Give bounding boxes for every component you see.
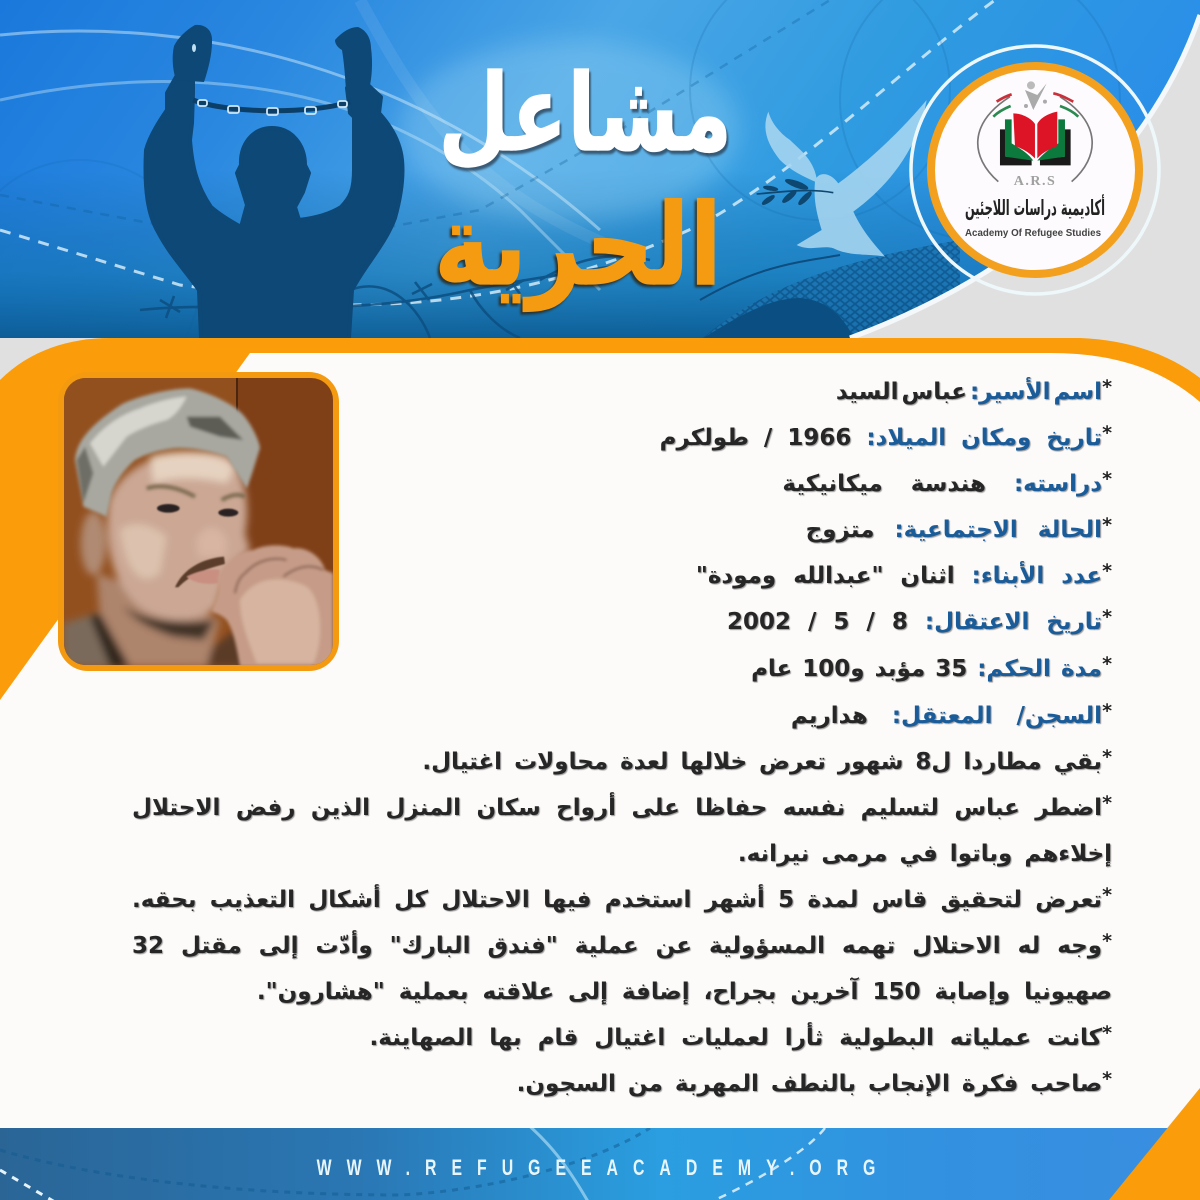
photo frame [58, 372, 339, 671]
detail: marital status: *الحالة الاجتماعية: متزوج [806, 514, 1112, 543]
detail: prison: *السجن/ المعتقل: هداريم [791, 700, 1112, 729]
detail: arrest date: *تاريخ الاعتقال: 8 / 5 / 2002 [727, 606, 1112, 635]
detail: name: *اسم الأسير: عباس السيد [836, 376, 1112, 405]
silhouette: prisoner with chained raised fists [146, 25, 403, 338]
eyes [157, 504, 180, 513]
panel: white content area [0, 353, 1200, 1128]
moustache [175, 557, 225, 587]
logo: A.R.S letters: A.R.S [1014, 174, 1056, 189]
ear [81, 512, 106, 575]
banner: blue sky background [0, 0, 1200, 338]
paragraph: interrogation: *تعرض لتحقيق قاس لمدة 5 أشهر استخدم فيها الاحتلال كل أشكال التعذيب بحقه. [132, 884, 1112, 913]
lips [187, 569, 220, 584]
detail: children: *عدد الأبناء: اثنان "عبدالله ومودة" [696, 560, 1112, 589]
footer url: WWW.REFUGEEACADEMY.ORG [317, 1157, 875, 1181]
footer bar [0, 1088, 1200, 1200]
title [434, 53, 732, 311]
left fist [173, 25, 212, 82]
paragraph: revenge operations: *كانت عملياته البطولية ثأرا لعمليات اغتيال قام بها الصهاينة. [370, 1022, 1112, 1051]
shirt [64, 611, 114, 665]
paragraph: charges: *وجه له الاحتلال تهمه المسؤولية عن عملية "فندق البارك" وأدّت إلى مقتل 32 [132, 930, 1112, 959]
icon: chain between wrists [193, 100, 350, 115]
brows [147, 486, 195, 497]
orange band behind content panel [0, 338, 1200, 720]
logo badge [911, 46, 1159, 294]
paragraph: forced surrender continued: إخلاءهم وباتوا في مرمى نيرانه. [738, 841, 1112, 867]
detail: birth date and place: *تاريخ ومكان الميلاد: 1966 / طولكرم [660, 422, 1112, 451]
white stripe along banner curve [850, 15, 1200, 338]
logo: English name: Academy Of Refugee Studies [965, 227, 1101, 239]
paragraph: forced surrender: *اضطر عباس لتسليم نفسه حفاظا على أرواح سكان المنزل الذين رفض الاحتلال [132, 792, 1112, 821]
icon: orange corner triangle [1109, 1088, 1200, 1200]
title line 2: orange: الحرية [434, 179, 722, 311]
paragraph: charges continued: صهيونيا وإصابة 150 آخرين بجراح، إضافة إلى علاقته بعملية "هشارون". [257, 979, 1112, 1005]
barbed wire [140, 256, 650, 338]
logo: book [1000, 112, 1071, 165]
title line 1: white: مشاعل [438, 53, 732, 176]
face [107, 452, 250, 620]
neck [97, 573, 220, 667]
logo: wheat arcs and figure [978, 81, 1092, 182]
paragraph: fugitive period: *بقي مطاردا ل8 شهور تعرض خلالها لعدة محاولات اغتيال. [422, 746, 1112, 775]
detail: studies: *دراسته: هندسة ميكانيكية [782, 468, 1112, 497]
paragraph: smuggled sperm idea: *صاحب فكرة الإنجاب بالنطف المهربة من السجون. [517, 1068, 1112, 1097]
photo: portrait of the prisoner [63, 378, 333, 667]
hands [212, 545, 333, 667]
right fist [335, 27, 372, 90]
detail: sentence: *مدة الحكم: 35 مؤبد و100 عام [751, 653, 1112, 682]
icon: white dove with olive branch [757, 100, 927, 257]
hair [75, 388, 260, 517]
